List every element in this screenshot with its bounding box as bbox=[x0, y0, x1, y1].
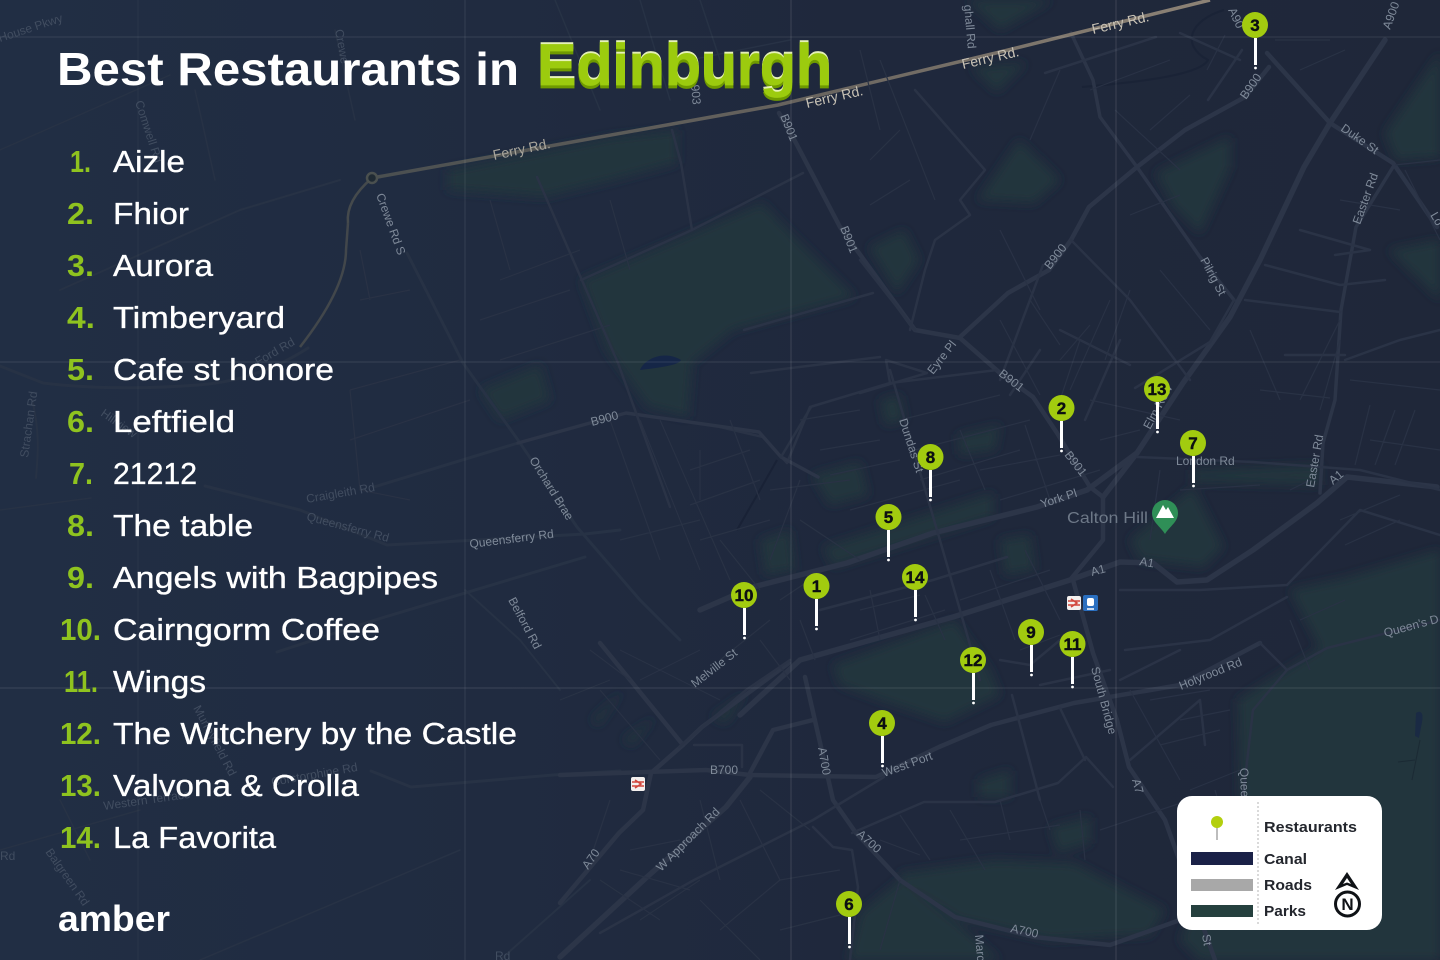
pin 6: 6 bbox=[844, 895, 854, 914]
map street labels: Corstorphine Rd bbox=[270, 760, 359, 789]
map street labels: W Approach Rd bbox=[653, 805, 723, 874]
map street labels: B900 bbox=[589, 408, 620, 429]
icon: north arrow bbox=[1335, 872, 1360, 916]
pin 1: 1 bbox=[812, 577, 821, 596]
legend: restaurants bbox=[1211, 816, 1357, 840]
title: Best Restaurants in bbox=[57, 43, 519, 95]
map street labels: B901 bbox=[777, 112, 801, 143]
map street labels: Balgreen Rd bbox=[43, 846, 92, 908]
icon: Calton Hill marker bbox=[1152, 500, 1178, 534]
map street labels: York Pl bbox=[1039, 486, 1079, 511]
pin 2 bbox=[1048, 395, 1074, 452]
restaurant list: 5. bbox=[67, 352, 94, 387]
far-side roads bbox=[0, 0, 790, 960]
legend panel bbox=[1177, 796, 1382, 930]
map street labels: Belford Rd bbox=[505, 595, 544, 651]
pin 4: 4 bbox=[877, 714, 887, 733]
pin 4 bbox=[869, 710, 895, 767]
map street labels: A700 bbox=[815, 746, 834, 776]
minor streets bbox=[350, 35, 1440, 960]
map street labels: Ferry Rd. bbox=[1090, 8, 1151, 37]
map street labels: A90 bbox=[1225, 5, 1247, 31]
main roads bbox=[518, 33, 1440, 960]
map street labels: A7 bbox=[1129, 777, 1147, 795]
restaurant list: Timberyard bbox=[113, 300, 285, 335]
map street labels: Ferry Rd. bbox=[960, 43, 1021, 72]
map street labels: Comwell Rd bbox=[132, 99, 165, 164]
map street labels: Duke St bbox=[1338, 121, 1382, 157]
map street labels: ghall Rd bbox=[961, 4, 979, 49]
pin 8: 8 bbox=[926, 448, 935, 467]
legend: parks bbox=[1191, 903, 1306, 920]
map street labels: B700 bbox=[710, 763, 738, 777]
legend: canal bbox=[1191, 851, 1307, 868]
title: Edinburgh bbox=[537, 33, 832, 98]
restaurant list: Aurora bbox=[113, 248, 214, 283]
pin 10: 10 bbox=[735, 586, 753, 605]
restaurant list: 3. bbox=[67, 248, 94, 283]
pin 9 bbox=[1018, 619, 1044, 676]
restaurant list: 1. bbox=[70, 144, 91, 179]
restaurant list: Fhior bbox=[113, 196, 189, 231]
pin 10 bbox=[731, 582, 757, 639]
restaurant list: 13. bbox=[60, 768, 101, 803]
restaurant list: 7. bbox=[69, 456, 93, 491]
map street labels: Queensferry Rd bbox=[305, 509, 391, 545]
title: Edinburgh bbox=[537, 36, 832, 101]
restaurant list: 8. bbox=[67, 508, 94, 543]
legend: restaurants: Restaurants bbox=[1264, 819, 1357, 836]
pin 2: 2 bbox=[1057, 399, 1066, 418]
Ferry Road bbox=[300, 0, 1210, 347]
title: Edinburgh bbox=[537, 31, 832, 96]
map street labels: Elm Row bbox=[1140, 382, 1175, 431]
map street labels: Easter Rd bbox=[1303, 434, 1326, 489]
pin 3: 3 bbox=[1250, 16, 1260, 35]
map street labels: South Bridge bbox=[1088, 665, 1120, 736]
restaurant list bbox=[60, 144, 517, 855]
canal and water bbox=[640, 10, 1423, 780]
pin 12: 12 bbox=[964, 651, 982, 670]
restaurant list: Leftfield bbox=[113, 404, 235, 439]
pin 13 bbox=[1144, 376, 1170, 433]
pin 5 bbox=[876, 504, 902, 561]
restaurant list: 14. bbox=[60, 820, 101, 855]
map street labels: London Rd bbox=[1176, 454, 1235, 468]
restaurant list: La Favorita bbox=[113, 820, 277, 855]
restaurant list: 11. bbox=[64, 664, 98, 699]
map street labels: Queen's D bbox=[1382, 612, 1440, 640]
restaurant list: Wings bbox=[113, 664, 206, 699]
map street labels: Holyrood Rd bbox=[1177, 655, 1244, 693]
map street labels: Rd bbox=[0, 849, 15, 863]
restaurant list: 10. bbox=[60, 612, 101, 647]
legend: canal: Canal bbox=[1264, 851, 1307, 868]
map street labels: Orchard Brae bbox=[526, 454, 577, 523]
icon: Waverley rail and bus bbox=[1067, 595, 1098, 611]
restaurant list: Angels with Bagpipes bbox=[113, 560, 438, 595]
map street labels: A1 bbox=[1138, 554, 1156, 571]
amber logo: amber bbox=[58, 898, 170, 939]
map street labels: Calton Hill bbox=[1067, 510, 1148, 527]
map street labels: A1 bbox=[1089, 561, 1107, 579]
map street labels: 903 bbox=[688, 84, 704, 106]
restaurant list: 6. bbox=[67, 404, 94, 439]
map street labels: A900 bbox=[1380, 0, 1403, 31]
map street labels: Hillview bbox=[98, 406, 140, 441]
map street labels: A700 bbox=[1009, 921, 1040, 941]
icon: Haymarket rail bbox=[631, 777, 645, 791]
pin 14: 14 bbox=[906, 568, 925, 587]
map street labels: B900 bbox=[1041, 241, 1070, 272]
map street labels: Ferry Rd. bbox=[491, 135, 552, 163]
map street labels: A1 bbox=[1326, 467, 1346, 487]
restaurant list: 4. bbox=[67, 300, 95, 335]
restaurant list: Cafe st honore bbox=[113, 352, 334, 387]
pin 13: 13 bbox=[1148, 380, 1166, 399]
restaurant list: 21212 bbox=[113, 456, 197, 491]
legend: parks: Parks bbox=[1264, 903, 1306, 920]
map street labels: B901 bbox=[1062, 448, 1090, 479]
restaurant list: Valvona & Crolla bbox=[113, 768, 360, 803]
map street labels: A70 bbox=[579, 846, 603, 872]
map street labels: Western Terrace bbox=[102, 787, 191, 813]
pin 7 bbox=[1180, 430, 1206, 487]
map street labels: St bbox=[1199, 933, 1215, 947]
pin 8 bbox=[918, 444, 944, 501]
map street labels: B901 bbox=[996, 366, 1027, 395]
map street labels: B901 bbox=[837, 224, 861, 255]
legend: roads bbox=[1191, 877, 1312, 894]
map street labels: B900 bbox=[1237, 70, 1265, 102]
map street labels: Ferry Rd. bbox=[804, 82, 865, 111]
map street labels: Ford Rd bbox=[252, 335, 297, 369]
restaurant list: 9. bbox=[67, 560, 94, 595]
pin 6 bbox=[836, 891, 862, 948]
restaurant list: 12. bbox=[60, 716, 101, 751]
map street labels: Pilrig St bbox=[1197, 255, 1229, 299]
restaurant list: Aizle bbox=[113, 144, 185, 179]
map street labels: Dundas St bbox=[896, 417, 927, 475]
map street labels: Easter Rd bbox=[1350, 171, 1381, 226]
pin 11: 11 bbox=[1064, 635, 1081, 654]
restaurant map pins bbox=[731, 12, 1268, 948]
title bbox=[57, 31, 832, 101]
map street labels: Murrayfield Rd bbox=[190, 703, 239, 778]
map street labels: Craigleith Rd bbox=[305, 480, 376, 506]
pin 5: 5 bbox=[884, 508, 893, 527]
restaurant list: 2. bbox=[67, 196, 94, 231]
pin 3 bbox=[1242, 12, 1268, 69]
pin 11 bbox=[1060, 631, 1086, 688]
pin 7: 7 bbox=[1188, 434, 1198, 453]
pin 12 bbox=[960, 647, 986, 704]
pin 9: 9 bbox=[1026, 623, 1036, 642]
map parks bbox=[448, 0, 1440, 960]
map street labels: Melville St bbox=[688, 645, 740, 690]
pin 1 bbox=[804, 573, 830, 630]
map street labels: A700 bbox=[854, 827, 884, 856]
restaurant list: Cairngorm Coffee bbox=[113, 612, 380, 647]
map street labels: Crewe Rd S bbox=[373, 191, 408, 257]
icon: north arrow: N bbox=[1341, 895, 1354, 914]
map street labels: Strachan Rd bbox=[17, 390, 40, 458]
map street labels: Queensferry Rd bbox=[469, 527, 554, 551]
map street labels: West Port bbox=[880, 748, 935, 780]
pin 14 bbox=[902, 564, 928, 621]
map street labels: Crewe bbox=[332, 28, 352, 65]
legend: roads: Roads bbox=[1264, 877, 1312, 894]
map street labels: Quee bbox=[1237, 768, 1252, 798]
restaurant list: The table bbox=[113, 508, 253, 543]
restaurant list: The Witchery by the Castle bbox=[113, 716, 517, 751]
map street labels: Eyre Pl bbox=[924, 338, 959, 377]
